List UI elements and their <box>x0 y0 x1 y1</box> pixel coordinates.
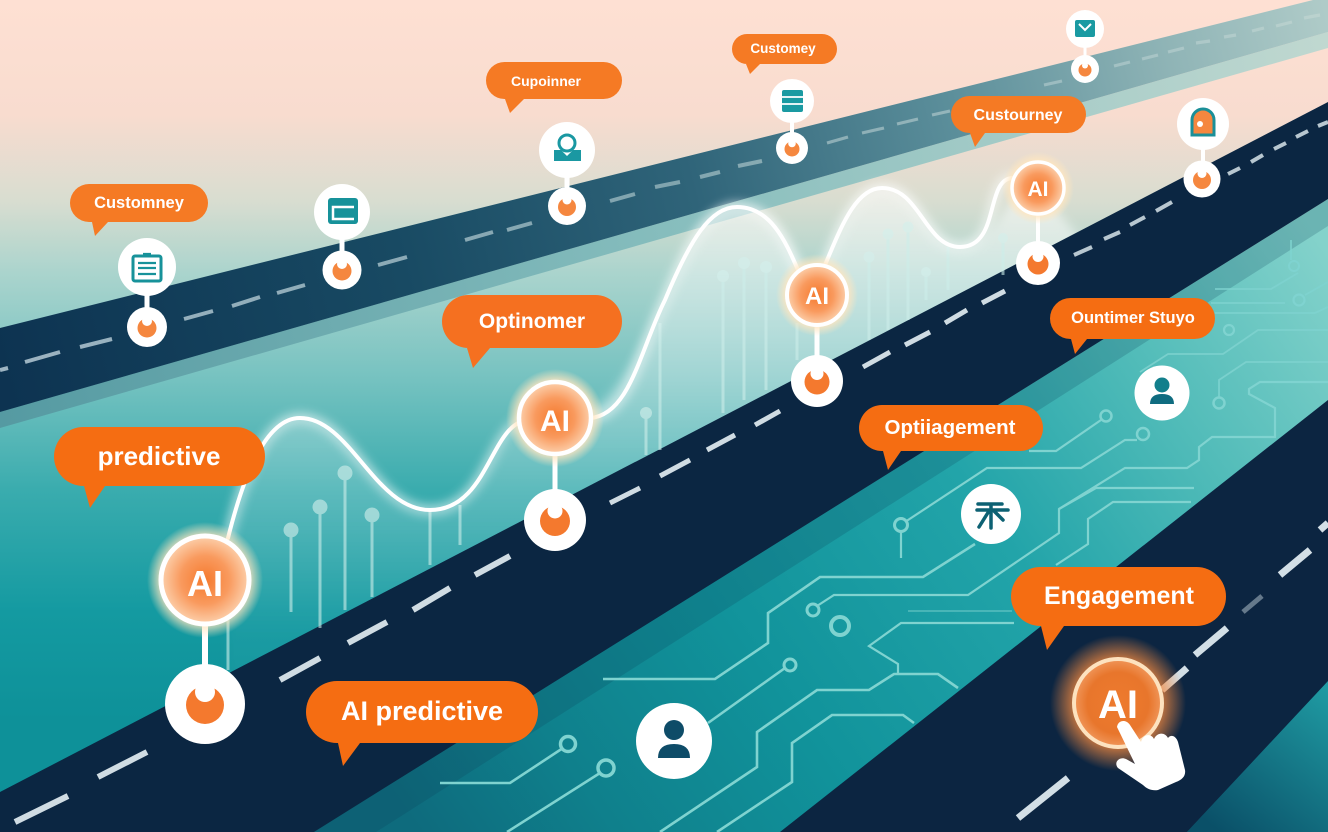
glow area under the wave <box>228 188 1090 680</box>
AI node 1 <box>147 522 263 638</box>
bubble: predictive <box>54 427 265 508</box>
AI button with click glow <box>1050 635 1186 771</box>
AI node 4: AI <box>1028 178 1048 201</box>
icon: pointing hand <box>1116 721 1185 790</box>
circuit traces <box>440 240 1328 832</box>
bubble: Cupoinner <box>486 62 622 113</box>
bubble: AI predictive: AI predictive <box>341 696 503 726</box>
bubble: Optinomer <box>442 295 622 368</box>
road node: middle 2 <box>524 489 586 551</box>
connectors from AI nodes to road nodes <box>205 214 1038 680</box>
shaded stripe along middle road <box>314 199 1328 832</box>
road: top road dashes <box>0 15 1320 370</box>
bubble: predictive: predictive <box>98 441 220 471</box>
AI node 4 <box>1002 152 1074 224</box>
bubble: Customey: Customey <box>750 41 816 56</box>
bubble: Optiiagement <box>859 405 1043 470</box>
bubble: Engagement <box>1011 567 1226 650</box>
AI button with click glow: AI <box>1098 683 1138 727</box>
top road pin 2 with card icon <box>314 184 370 290</box>
bubble: Customney <box>70 184 208 236</box>
AI node 3 <box>776 254 858 336</box>
lower road dashes <box>1018 523 1328 818</box>
center traces <box>817 382 1328 673</box>
icon: person bottom <box>636 703 712 779</box>
glowing wave line <box>228 178 1012 538</box>
icon: figure symbol <box>961 484 1021 544</box>
AI node 2: AI <box>540 405 570 438</box>
circuit band between middle and lower road <box>314 199 1328 832</box>
bubble: Engagement: Engagement <box>1044 582 1195 610</box>
road: lower main road <box>780 400 1328 832</box>
bubble: Custourney: Custourney <box>974 107 1063 124</box>
AI node 1: AI <box>187 563 223 604</box>
bubble: Customey <box>732 34 837 74</box>
road: top far road <box>0 0 1328 428</box>
data pins under the wave <box>228 222 1008 670</box>
bubble: Cupoinner: Cupoinner <box>511 73 582 89</box>
top road pin 5 with bag icon <box>1066 10 1104 83</box>
bottom right corner band <box>1187 681 1328 832</box>
circuit ring nodes <box>560 261 1304 776</box>
bubble: Ountimer Stuyo: Ountimer Stuyo <box>1071 309 1195 327</box>
top road pin 6 with media icon <box>1177 98 1229 198</box>
AI node 3: AI <box>805 283 829 310</box>
icon: person upper right <box>1134 366 1190 420</box>
bubble: Ountimer Stuyo <box>1050 298 1215 354</box>
road node: middle 3 <box>791 355 843 407</box>
bubble: Optiiagement: Optiiagement <box>884 416 1016 439</box>
bubble: AI predictive <box>306 681 538 766</box>
top road pin 1 with clipboard icon <box>118 238 176 347</box>
lower left traces <box>440 544 975 832</box>
bubble: Customney: Customney <box>94 194 185 212</box>
bubble: Custourney <box>951 96 1086 147</box>
road node: middle 1 <box>165 664 245 744</box>
top road pin 3 with location icon <box>539 122 595 225</box>
upper right traces <box>1140 240 1328 397</box>
top road pin 4 with server icon <box>770 79 814 164</box>
bubble: Optinomer: Optinomer <box>479 310 585 333</box>
road node: middle 4 <box>1016 241 1060 285</box>
AI node 2 <box>506 369 604 467</box>
